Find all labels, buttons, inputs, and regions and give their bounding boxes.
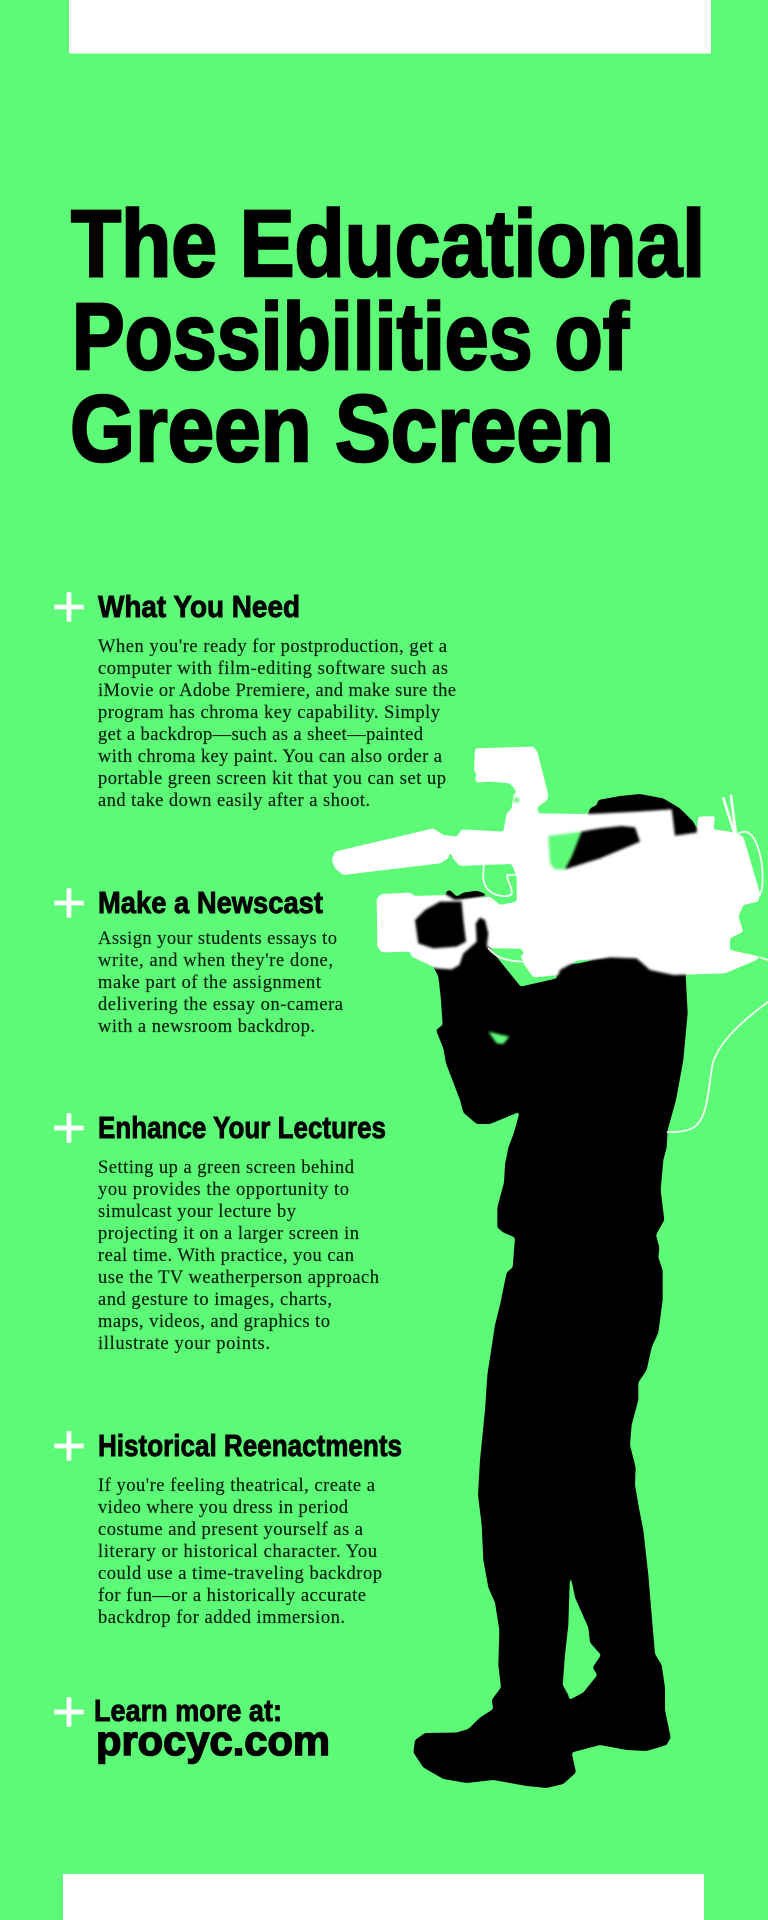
text block: Enhance Your Lectures: projecting it on a larger screen in — [98, 1224, 359, 1244]
illustration: cameraman silhouette — [332, 747, 768, 1788]
text block: Historical Reenactments — [98, 1476, 382, 1628]
heading: Enhance Your Lectures: Enhance Your Lectures — [98, 1110, 386, 1145]
text block: What You Need: program has chroma key capability. Simply — [98, 703, 441, 723]
text block: What You Need: computer with film-editing software such as — [98, 659, 448, 679]
text block: What You Need: portable green screen kit that you can set up — [98, 769, 446, 789]
text block: Enhance Your Lectures: maps, videos, and graphics to — [98, 1312, 330, 1332]
text block: Enhance Your Lectures: illustrate your points. — [98, 1334, 270, 1354]
heading: Historical Reenactments: Historical Reenactments — [98, 1428, 402, 1463]
heading: Make a Newscast: Make a Newscast — [98, 885, 323, 920]
cables and antennas — [483, 796, 768, 1132]
silhouette and camera shapes — [332, 747, 760, 1788]
text block: Make a Newscast: make part of the assignment — [98, 973, 322, 993]
text block: What You Need: When you're ready for postproduction, get a — [98, 637, 447, 657]
text block: What You Need: get a backdrop—such as a sheet—painted — [98, 725, 424, 745]
text block: What You Need: with chroma key paint. You can also order a — [98, 747, 442, 767]
icon: plus — [54, 1431, 84, 1461]
text block: Historical Reenactments: could use a time-traveling backdrop — [98, 1564, 382, 1584]
section: call to action — [54, 1693, 330, 1764]
text block: Historical Reenactments: backdrop for added immersion. — [98, 1608, 345, 1628]
text: procyc.com: procyc.com — [96, 1717, 330, 1764]
text block: Historical Reenactments: literary or historical character. You — [98, 1542, 377, 1562]
text block: Make a Newscast: delivering the essay on-camera — [98, 995, 343, 1015]
text: Learn more at: Learn more at: — [94, 1693, 282, 1728]
text block: Enhance Your Lectures: use the TV weatherperson approach — [98, 1268, 379, 1288]
text block: Enhance Your Lectures: simulcast your lecture by — [98, 1202, 297, 1222]
icon: plus — [54, 888, 84, 918]
title — [70, 191, 705, 482]
icon: plus — [54, 1697, 84, 1727]
text block: Make a Newscast: write, and when they're done, — [98, 951, 333, 971]
text block: Make a Newscast: Assign your students essays to — [98, 929, 337, 949]
text block: Enhance Your Lectures: you provides the opportunity to — [98, 1180, 349, 1200]
heading: What You Need: What You Need — [98, 589, 300, 624]
text block: Enhance Your Lectures: and gesture to images, charts, — [98, 1290, 332, 1310]
section: Make a Newscast — [54, 885, 343, 1037]
text block: What You Need: and take down easily after a shoot. — [98, 791, 370, 811]
text block: Historical Reenactments: If you're feeling theatrical, create a — [98, 1476, 375, 1496]
title: Green Screen — [70, 376, 614, 482]
silhouette: upper body — [433, 917, 688, 1163]
text block: Enhance Your Lectures: real time. With practice, you can — [98, 1246, 354, 1266]
text block: Make a Newscast — [98, 929, 343, 1037]
icon: plus — [54, 592, 84, 622]
video camera — [332, 747, 760, 977]
silhouette: legs and shoes — [413, 1090, 676, 1788]
text block: Historical Reenactments: costume and present yourself as a — [98, 1520, 363, 1540]
top white banner — [69, 0, 711, 54]
bottom white banner — [63, 1874, 704, 1920]
text block: Historical Reenactments: for fun—or a historically accurate — [98, 1586, 366, 1606]
section: Enhance Your Lectures — [54, 1110, 386, 1354]
section: What You Need — [54, 589, 456, 811]
text block: Enhance Your Lectures: Setting up a green screen behind — [98, 1158, 355, 1178]
icon: plus — [54, 1113, 84, 1143]
silhouette: hair — [588, 794, 699, 837]
camera details: window, strap, hand — [415, 797, 640, 1044]
text block: Make a Newscast: with a newsroom backdrop. — [98, 1017, 315, 1037]
text block: What You Need: iMovie or Adobe Premiere, and make sure the — [98, 681, 456, 701]
text block: Enhance Your Lectures — [98, 1158, 379, 1354]
section: Historical Reenactments — [54, 1428, 402, 1628]
title: Possibilities of — [72, 284, 629, 390]
text block: What You Need — [98, 637, 456, 811]
text block: Historical Reenactments: video where you dress in period — [98, 1498, 349, 1518]
